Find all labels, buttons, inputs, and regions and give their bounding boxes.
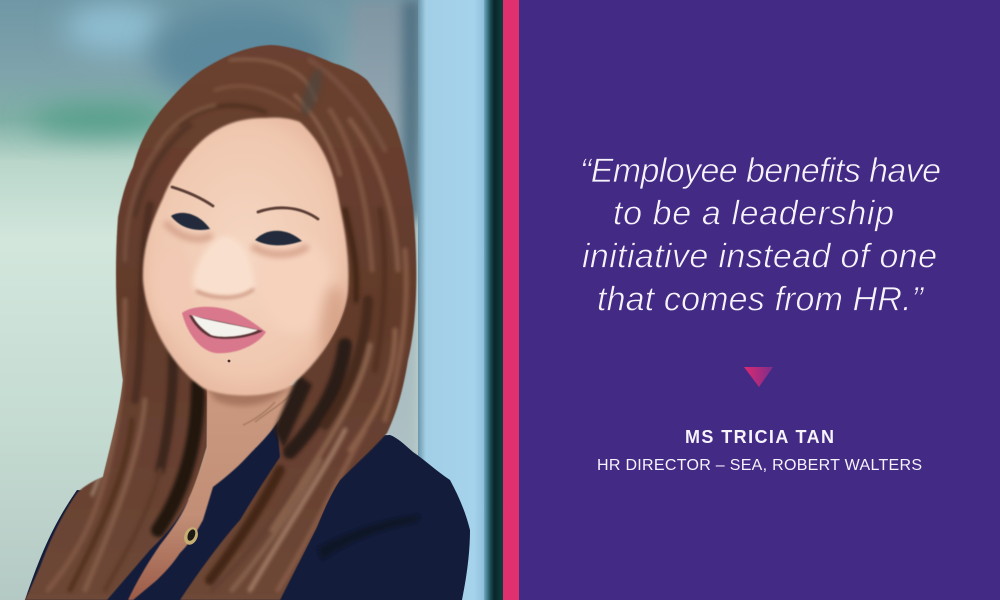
- neck crease: [243, 392, 293, 425]
- pink divider bar: [503, 0, 519, 600]
- quote text: initiative instead of one: [582, 238, 937, 276]
- jacket: [25, 415, 470, 600]
- jacket fold shadow: [318, 515, 420, 560]
- quote text: that comes from HR.”: [597, 280, 925, 318]
- purple quote panel: [519, 0, 1000, 600]
- mole: [228, 360, 230, 362]
- quote text: “Employee benefits have: [580, 152, 941, 190]
- left eye: [171, 213, 210, 230]
- quote text: to be a leadership: [613, 194, 894, 232]
- quote text: [580, 152, 941, 318]
- photo background: [0, 0, 503, 600]
- shadow beside neck: [274, 374, 312, 448]
- face: [143, 118, 348, 396]
- mouth: gums: [189, 315, 263, 339]
- triangle marker: [744, 367, 773, 387]
- mouth: teeth: [192, 315, 258, 337]
- neck and chest: [128, 385, 300, 600]
- hair strands: [48, 59, 406, 590]
- portrait: woman smiling: [25, 45, 470, 600]
- right eye: [255, 231, 302, 245]
- eyebrows: [172, 187, 213, 206]
- hair parting: [300, 68, 323, 114]
- hair mass: [25, 45, 416, 600]
- mouth: lips: [182, 307, 266, 353]
- cheek shading: [285, 254, 347, 354]
- eye shadow sockets: [165, 222, 308, 254]
- speaker name: MS TRICIA TAN: [685, 427, 834, 447]
- speaker role: HR DIRECTOR – SEA, ROBERT WALTERS: [597, 457, 922, 474]
- under-chin shadow: [205, 385, 290, 406]
- nose: [193, 236, 255, 297]
- necklace pendant: [182, 525, 200, 547]
